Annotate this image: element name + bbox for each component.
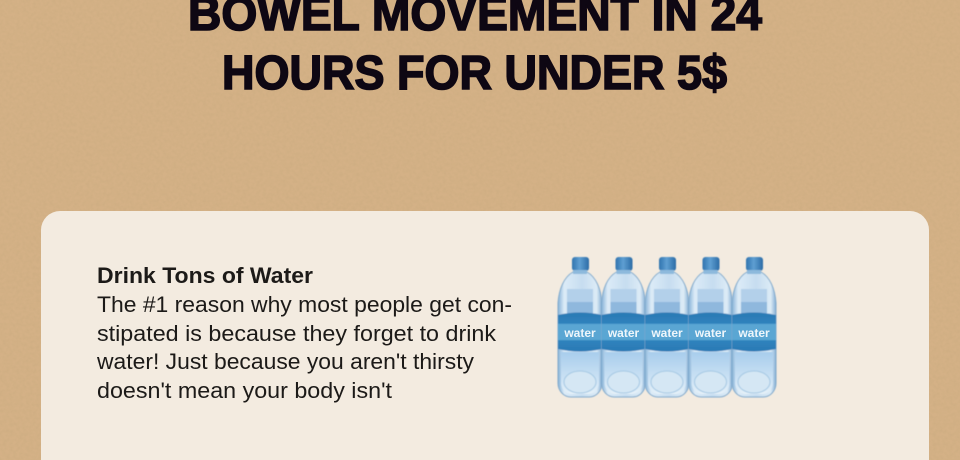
text block: drink tons of water (96, 263, 512, 403)
icon: water bottle 3 (645, 257, 689, 397)
icon: water bottle 2: water (607, 326, 639, 340)
icon: water bottle 1 (558, 257, 602, 397)
heading: drink tons of water: Drink Tons of Water (97, 263, 313, 288)
body text: The #1 reason why most people get con- (97, 292, 512, 317)
body text: doesn't mean your body isn't (97, 378, 393, 403)
icon: five water bottles (558, 257, 776, 397)
icon: water bottle 4: water (694, 326, 726, 340)
icon: water bottle 3: water (650, 326, 683, 340)
body text: water! Just because you aren't thirsty (96, 349, 475, 374)
body text (96, 292, 512, 403)
panel: drink water (41, 211, 929, 460)
icon: water bottle 1: water (563, 326, 596, 340)
icon: water bottle 4 (688, 257, 732, 397)
body text: stipated is because they forget to drink (97, 321, 497, 346)
icon: water bottle 5 (732, 257, 776, 397)
title (188, 0, 762, 100)
icon: water bottle 2 (602, 257, 646, 397)
title: HOURS FOR UNDER 5$ (222, 47, 727, 100)
icon: water bottle 5: water (737, 326, 770, 340)
